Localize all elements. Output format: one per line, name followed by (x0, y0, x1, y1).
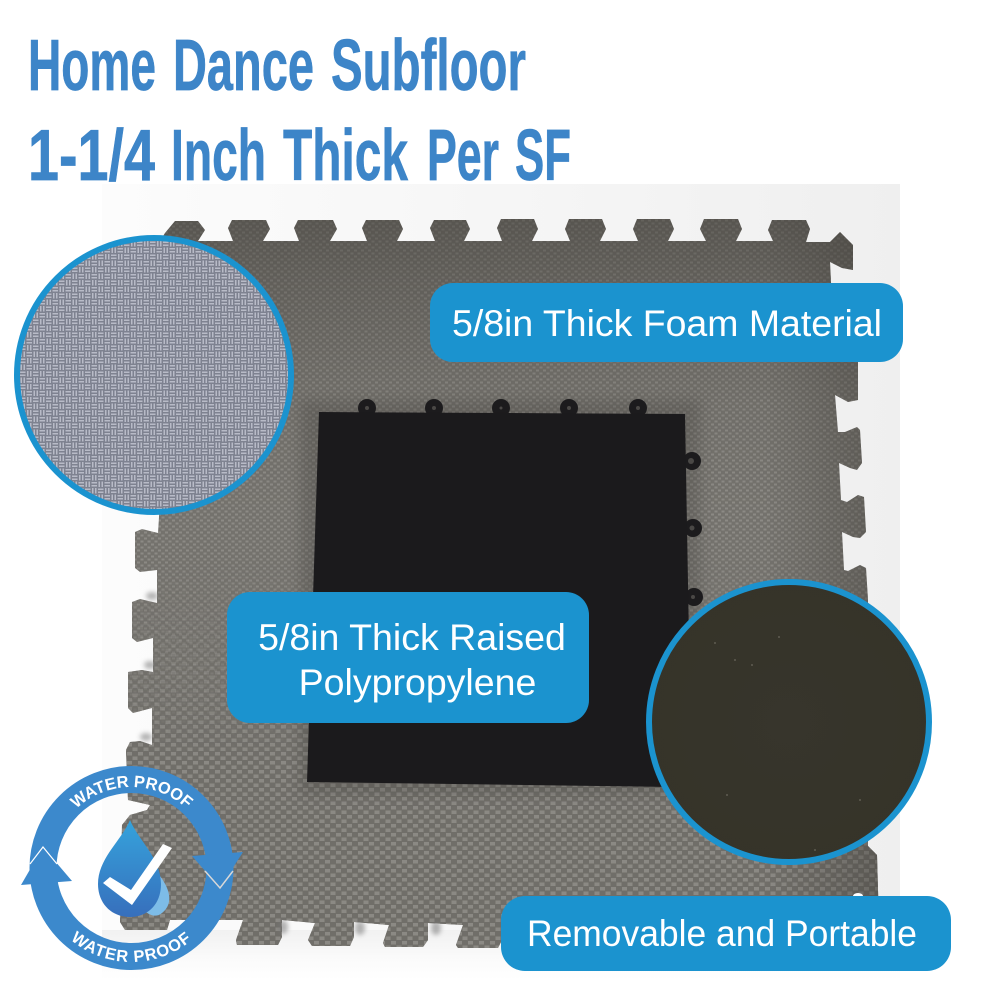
icon: check mark (103, 844, 172, 905)
callout: removable and portable (501, 896, 951, 971)
title: Dance (173, 26, 314, 106)
callout: foam material (430, 283, 903, 362)
callout: raised polypropylene (227, 592, 589, 723)
badge: water proof (21, 766, 243, 970)
product photo background (102, 184, 900, 980)
icon: water drop (98, 820, 161, 917)
arrow: pointing up on left (21, 847, 72, 885)
foam mat with puzzle edges (120, 219, 879, 948)
notch shadows (140, 592, 441, 935)
tile connectors (358, 399, 703, 606)
title: Per (427, 116, 499, 196)
title: Inch (171, 116, 266, 196)
title (28, 26, 571, 196)
water proof label top: WATER PROOF (69, 776, 194, 807)
zoom circle: foam texture (17, 238, 291, 512)
callout: foam material: 5/8in Thick Foam Material (452, 303, 882, 344)
title: Subfloor (331, 26, 526, 106)
callout: removable and portable: Removable and Portable (527, 913, 917, 954)
callout: raised polypropylene: 5/8in Thick Raised (258, 616, 566, 658)
icon: small back drop (146, 876, 169, 916)
zoom circle: polypropylene surface (649, 582, 929, 862)
arrow: pointing down on right (192, 852, 243, 888)
title: Home (28, 26, 156, 106)
title: SF (515, 116, 571, 196)
title: 1-1/4 (28, 116, 155, 196)
title: Thick (283, 116, 409, 196)
callout: raised polypropylene: Polypropylene (299, 661, 536, 703)
black polypropylene tile (300, 399, 703, 795)
water proof label bottom: WATER PROOF (72, 930, 189, 962)
